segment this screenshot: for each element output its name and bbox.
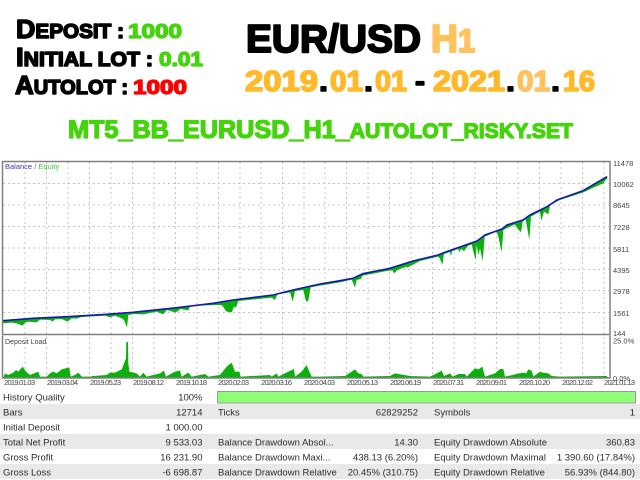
row: total net profit: Equity Drawdown Absolute: [434, 438, 547, 448]
title: symbol and timeframe: H1: [431, 18, 475, 61]
y axis labels: 0.0%: [613, 374, 630, 383]
x axis date labels: 2020.04.03: [304, 378, 335, 387]
y axis labels: 1561: [613, 309, 630, 318]
row: bars, ticks, symbols: Symbols: [434, 408, 471, 418]
autolot setting: [15, 70, 187, 100]
x axis date labels: 2020.02.03: [218, 378, 249, 387]
chart frame: [2, 162, 610, 334]
row: history quality: History Quality: [3, 392, 65, 404]
x axis date labels: 2020.03.16: [261, 378, 292, 387]
y axis labels: 25.0%: [613, 336, 635, 346]
x axis date labels: 2020.12.02: [562, 378, 593, 387]
row: bars, ticks, symbols: 1: [630, 408, 635, 418]
date range: .: [551, 66, 560, 98]
row: gross loss: -6 698.87: [162, 468, 202, 478]
row: gross loss: 20.45% (310.75): [348, 468, 418, 478]
row: gross profit: Gross Profit: [3, 452, 54, 464]
y axis labels: 8645: [613, 201, 630, 210]
row: gross profit: [3, 452, 635, 464]
y axis labels: 11478: [613, 159, 633, 168]
title: symbol and timeframe: EUR/USD: [246, 18, 421, 61]
date range: .: [364, 66, 373, 98]
initial lot setting: 0.01: [159, 49, 203, 71]
deposit load chart: [2, 336, 610, 378]
row: total net profit: 14.30: [394, 438, 418, 448]
x axis date labels: 2020.09.01: [476, 378, 507, 387]
row: bars, ticks, symbols: 62829252: [376, 408, 418, 418]
row: total net profit: Total Net Profit: [3, 438, 66, 448]
deposit load label: Deposit Load: [5, 339, 46, 346]
row: gross loss: Balance Drawdown Relative: [218, 468, 337, 478]
x axis date labels: [4, 378, 635, 387]
date range: 01: [330, 66, 363, 98]
row: total net profit: [3, 438, 635, 448]
x axis date labels: 2020.05.13: [347, 378, 378, 387]
row: gross profit: 1 390.60 (17.84%): [557, 452, 635, 464]
deposit setting: 1000: [128, 21, 182, 43]
date range: [245, 66, 595, 98]
set file name heading: MT5_BB_EURUSD_H1_AUTOLOT_RISKY.SET: [68, 116, 573, 144]
row: bars, ticks, symbols: Ticks: [218, 408, 240, 418]
date range: 2019: [245, 66, 318, 98]
statistics table: [0, 392, 640, 479]
row: gross profit: Equity Drawdown Maximal: [434, 452, 546, 464]
row: gross loss: 56.93% (844.80): [565, 468, 635, 478]
autolot setting: AUTOLOT :: [15, 70, 128, 100]
x axis date labels: 2020.07.31: [433, 378, 464, 387]
row: bars, ticks, symbols: Bars: [3, 408, 23, 418]
x axis date labels: 2019.05.23: [90, 378, 121, 387]
x axis date labels: 2019.01.03: [4, 378, 35, 387]
initial lot setting: [16, 42, 203, 72]
date range: .: [319, 66, 328, 98]
row: gross loss: Gross Loss: [3, 468, 51, 478]
equity curve right half: [320, 177, 607, 288]
row: initial deposit: 1 000.00: [166, 422, 202, 434]
row: total net profit: Balance Drawdown Absol...: [218, 438, 334, 448]
deposit setting: [16, 14, 182, 44]
row: initial deposit: Initial Deposit: [3, 422, 60, 434]
y axis labels: 7228: [613, 223, 630, 232]
row: gross profit: Balance Drawdown Maxi...: [218, 452, 330, 464]
y axis labels: 2978: [613, 287, 630, 296]
y axis labels: [613, 159, 635, 383]
x axis date labels: 2019.10.18: [176, 378, 207, 387]
table row bands: [0, 404, 640, 479]
row: initial deposit: [3, 422, 202, 434]
x axis date labels: 2020.10.20: [519, 378, 550, 387]
row: bars, ticks, symbols: [3, 408, 635, 418]
chart legend: Balance: [5, 162, 32, 171]
y axis labels: 10062: [613, 180, 634, 189]
date range: 01: [375, 66, 407, 98]
history quality bar: [218, 392, 636, 403]
row: gross loss: Equity Drawdown Relative: [434, 468, 545, 478]
row: history quality: [3, 392, 203, 404]
row: total net profit: 9 533.03: [166, 438, 202, 448]
date range: 01: [517, 66, 550, 98]
row: gross loss: [3, 468, 635, 478]
deposit load frame: [2, 336, 610, 378]
x axis date labels: 2021.01.13: [604, 378, 635, 387]
y axis labels: 4395: [613, 266, 630, 275]
row: history quality: 100%: [178, 392, 203, 404]
gridlines: [3, 162, 609, 378]
date range: .: [506, 66, 515, 98]
equity curve left half: [3, 284, 320, 328]
settings text block: [15, 14, 203, 100]
x axis date labels: 2019.03.04: [47, 378, 78, 387]
initial lot setting: INITIAL LOT :: [16, 42, 153, 72]
chart legend: / Equity: [34, 162, 59, 171]
deposit setting: DEPOSIT :: [16, 14, 124, 44]
row: gross profit: 438.13 (6.20%): [353, 452, 418, 464]
row: gross profit: 16 231.90: [160, 452, 202, 464]
y axis labels: 5811: [613, 245, 629, 254]
balance and equity chart: [2, 159, 635, 387]
autolot setting: 1000: [133, 77, 187, 99]
x axis date labels: 2019.08.12: [133, 378, 164, 387]
x axis date labels: 2020.06.19: [390, 378, 421, 387]
row: bars, ticks, symbols: 12714: [176, 408, 202, 418]
date range: 2021: [433, 66, 505, 98]
row: total net profit: 360.83: [606, 438, 635, 448]
balance line: [3, 177, 607, 321]
date range: -: [415, 66, 425, 98]
date range: 16: [563, 66, 595, 98]
y axis labels: 144: [613, 329, 626, 338]
